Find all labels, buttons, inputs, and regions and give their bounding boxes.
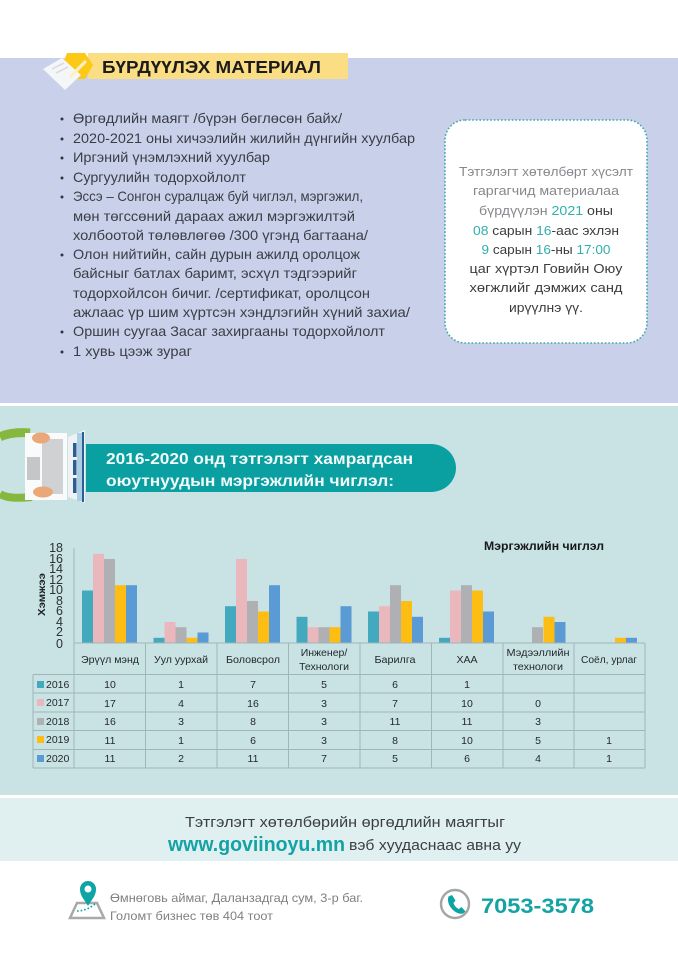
heading pill: оюутнуудын мэргэжлийн чиглэл: [106, 473, 394, 490]
y axis labels: 6 [56, 604, 63, 618]
table header: ХАА [456, 654, 478, 666]
y axis labels: 4 [56, 615, 63, 629]
y axis labels: 8 [56, 594, 63, 608]
table values: 6 [392, 679, 398, 691]
callout: deadline: ирүүлнэ үү. [509, 300, 583, 315]
y axis labels [49, 541, 63, 651]
table header: технологи [513, 661, 563, 673]
address [110, 891, 363, 923]
table values: 8 [250, 716, 256, 728]
legend years: 2020 [46, 753, 70, 765]
icon: map pin [70, 881, 104, 918]
heading pill [86, 444, 456, 492]
website banner [0, 798, 678, 861]
table header: Инженер/ [301, 647, 347, 659]
materials list: мөн төгссөний дараах ажил мэргэжилтэй [73, 208, 355, 224]
legend years: 2018 [46, 716, 70, 728]
table values [104, 679, 612, 765]
website banner: Тэтгэлэгт хөтөлбөрийн өргөдлийн маягтыг [185, 814, 506, 831]
table values: 3 [535, 716, 541, 728]
y axis labels: 12 [49, 573, 63, 587]
legend years: 2016 [46, 679, 70, 691]
materials list: Сургуулийн тодорхойлолт [73, 169, 247, 185]
website banner: вэб хуудаснаас авна уу [349, 837, 522, 854]
table values: 17 [104, 698, 116, 710]
table values: 7 [250, 679, 256, 691]
callout: deadline: гаргагчид материалаа [473, 183, 620, 198]
table values: 11 [105, 735, 116, 747]
callout: deadline: цаг хүртэл Говийн Оюу [470, 261, 623, 276]
y axis labels: 14 [49, 562, 63, 576]
table values: 1 [606, 735, 612, 747]
table header: Боловсрол [226, 654, 280, 666]
table header [81, 647, 637, 673]
materials list: холбоотой төлөвлөгөө /300 үгэнд багтаана/ [73, 227, 368, 243]
materials list [60, 110, 415, 359]
table values: 6 [250, 735, 256, 747]
table values: 7 [392, 698, 398, 710]
callout: deadline: 08 сарын 16-аас эхлэн [473, 223, 619, 238]
y axis labels: 16 [49, 552, 63, 566]
table values: 5 [392, 753, 398, 765]
panel: materials [0, 53, 678, 403]
callout: deadline: Тэтгэлэгт хөтөлбөрт хүсэлт [459, 164, 633, 179]
table values: 5 [535, 735, 541, 747]
materials list: 1 хувь цээж зураг [73, 343, 192, 359]
materials list: ажлаас үр шим хүртсэн хэндлэгийн хүний захиа/ [73, 304, 410, 320]
phone number: 7053-3578 [481, 895, 594, 918]
table values: 10 [104, 679, 116, 691]
materials list: Иргэний үнэмлэхний хуулбар [73, 149, 270, 165]
data table [33, 548, 645, 768]
materials list: Эссэ – Сонгон суралцаж буй чиглэл, мэргэжил, [73, 188, 363, 204]
table header: Уул уурхай [154, 654, 208, 666]
table values: 3 [321, 698, 327, 710]
table values: 11 [105, 753, 116, 765]
table values: 11 [248, 753, 259, 765]
materials list: Өргөдлийн маягт /бүрэн бөглөсөн байх/ [73, 110, 342, 126]
callout: deadline [445, 120, 647, 343]
table values: 16 [104, 716, 116, 728]
panel: chart section [0, 406, 678, 795]
legend years: 2017 [46, 697, 70, 709]
table values: 2 [178, 753, 184, 765]
table values: 1 [464, 679, 470, 691]
table values: 11 [390, 716, 401, 728]
table values: 10 [461, 735, 473, 747]
table values: 3 [321, 735, 327, 747]
materials list: байсныг батлах баримт, эсхүл тэдгээрийг [73, 265, 357, 281]
materials list: Оршин суугаа Засаг захиргааны тодорхойлолт [73, 323, 386, 339]
table values: 7 [321, 753, 327, 765]
y axis labels: 2 [56, 625, 63, 639]
y axis labels: 0 [56, 637, 63, 651]
axis title: Хэмжээ [36, 573, 48, 616]
table values: 1 [178, 735, 184, 747]
address: Өмнөговь аймаг, Даланзадгад сум, 3-р баг. [110, 891, 363, 905]
materials list: тодорхойлсон бичиг. /сертификат, оролцсон [73, 285, 370, 301]
table header: Соёл, урлаг [581, 654, 637, 666]
table values: 1 [178, 679, 184, 691]
chart title: Мэргэжлийн чиглэл [484, 539, 604, 553]
legend years: 2019 [46, 734, 70, 746]
table values: 4 [535, 753, 541, 765]
table values: 3 [321, 716, 327, 728]
materials list: Олон нийтийн, сайн дурын ажилд оролцож [73, 246, 361, 262]
y axis labels: 10 [49, 583, 63, 597]
address: Голомт бизнес төв 404 тоот [110, 909, 274, 923]
heading banner: БҮРДҮҮЛЭХ МАТЕРИАЛ [102, 57, 321, 77]
legend years [37, 679, 70, 765]
website banner: www.goviinoyu.mn [167, 834, 345, 856]
table values: 8 [392, 735, 398, 747]
table header: Технологи [299, 661, 349, 673]
callout: deadline: бүрдүүлэн 2021 оны [479, 203, 613, 218]
icon: laptop with hands [0, 430, 85, 503]
materials list: 2020-2021 оны хичээлийн жилийн дүнгийн хуулбар [73, 130, 415, 146]
table header: Барилга [374, 654, 416, 666]
table header: Эрүүл мэнд [81, 654, 139, 666]
callout: deadline: хөгжлийг дэмжих санд [470, 280, 623, 295]
table header: Мэдээллийн [506, 647, 570, 659]
table values: 1 [606, 753, 612, 765]
table values: 10 [461, 698, 473, 710]
icon: paper and pencil [43, 58, 85, 90]
table values: 11 [462, 716, 473, 728]
icon: phone [441, 890, 469, 918]
table values: 16 [247, 698, 259, 710]
bar chart [82, 554, 637, 643]
table values: 4 [178, 698, 184, 710]
table values: 3 [178, 716, 184, 728]
y axis labels: 18 [49, 541, 63, 555]
callout: deadline: 9 сарын 16-ны 17:00 [482, 242, 610, 257]
table values: 0 [535, 698, 541, 710]
heading pill: 2016-2020 онд тэтгэлэгт хамрагдсан [106, 451, 413, 468]
table values: 5 [321, 679, 327, 691]
heading banner [62, 53, 348, 79]
table values: 6 [464, 753, 470, 765]
